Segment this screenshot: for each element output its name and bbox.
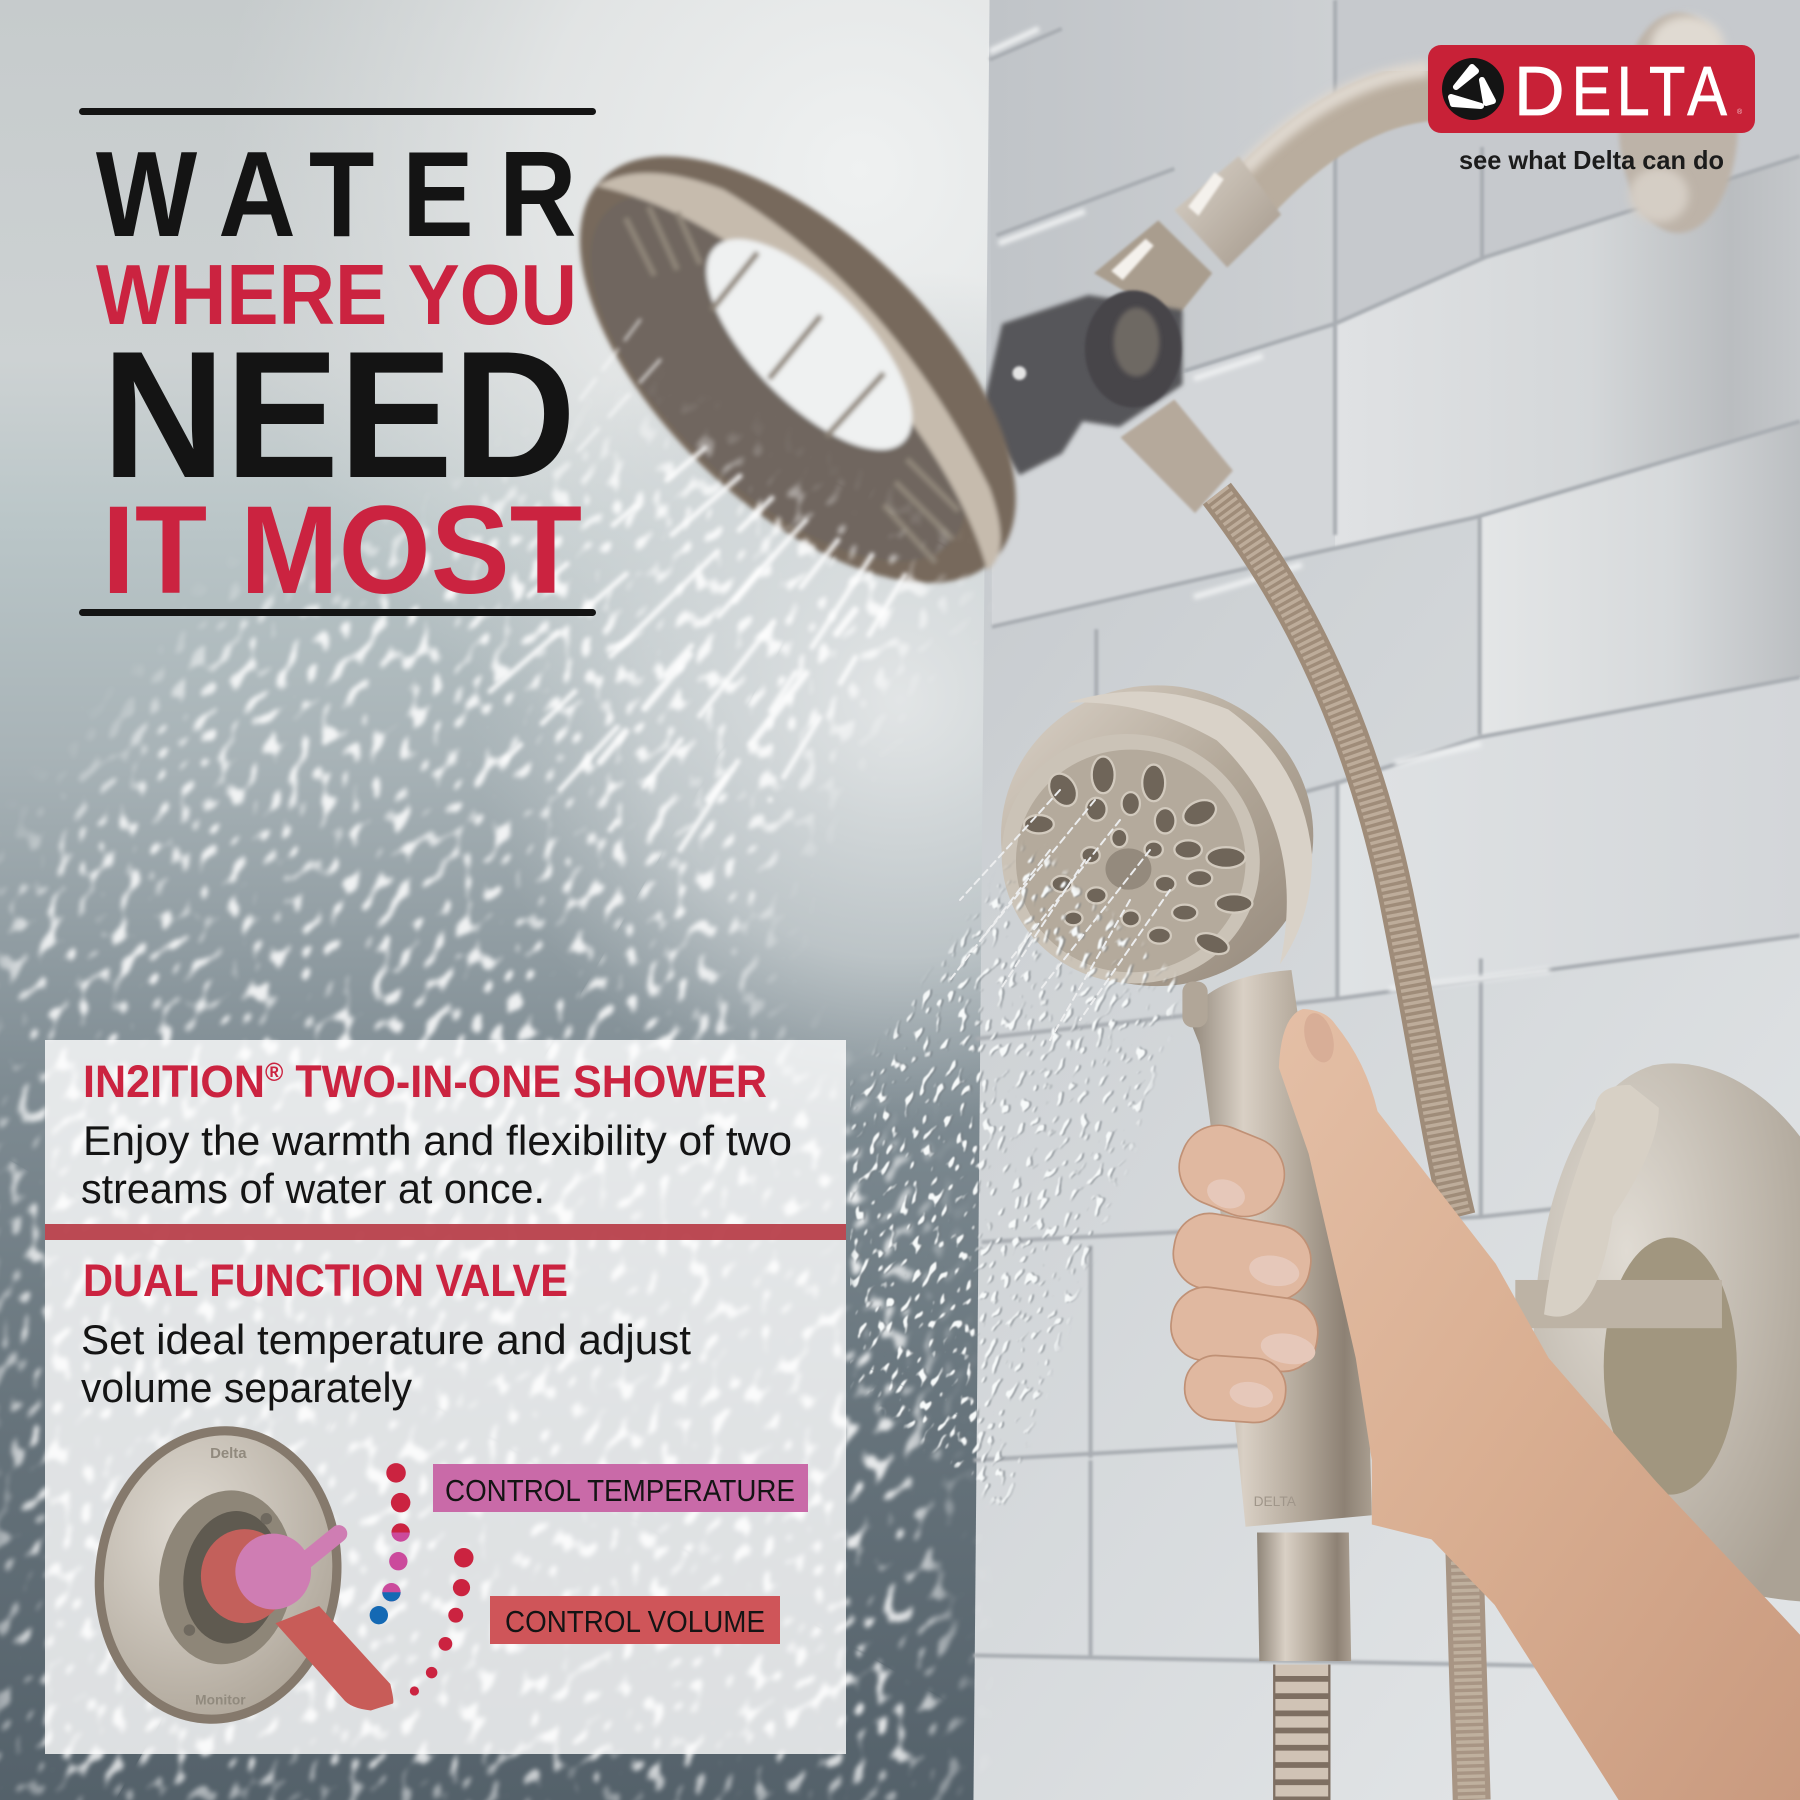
text: valve description: volume separately <box>81 1364 412 1411</box>
arm connector <box>1174 156 1281 267</box>
red lever <box>276 1606 393 1710</box>
heading: dual function valve: DUAL FUNCTION VALVE <box>83 1255 568 1306</box>
pink handle <box>266 1534 339 1592</box>
registered mark: ® <box>1737 108 1743 116</box>
logo badge <box>1428 45 1755 133</box>
temperature dots <box>370 1463 410 1624</box>
hose <box>1217 494 1472 1800</box>
valve illustration: Monitor <box>195 1693 246 1708</box>
heading: in2ition: TWO-IN-ONE SHOWER <box>283 1056 767 1107</box>
divider band <box>45 1224 846 1240</box>
title: need: NEED <box>102 314 576 516</box>
red collar <box>201 1529 288 1623</box>
logo wordmark: ELTA <box>1572 51 1728 130</box>
text: valve description: Set ideal temperature and adjust <box>81 1316 691 1363</box>
panel: product features <box>45 1040 846 1754</box>
lower hose <box>1273 1665 1330 1800</box>
label: control temperature <box>433 1464 808 1512</box>
diverter mount <box>982 290 1182 475</box>
text: valve description <box>81 1316 691 1411</box>
title: it most: IT MOST <box>102 481 582 620</box>
fingernails <box>1203 1010 1339 1410</box>
hand shower handle: DELTA <box>1254 1494 1297 1509</box>
hand shower handle <box>1182 970 1372 1800</box>
hand shower head <box>966 685 1313 1020</box>
tagline: see what Delta can do <box>1459 145 1724 175</box>
hand shower nozzles <box>1024 757 1252 958</box>
title bottom rule <box>79 609 596 616</box>
title: where you: WHERE YOU <box>96 248 577 343</box>
hand shower spray <box>850 840 1190 1520</box>
valve illustration: Delta <box>210 1445 247 1462</box>
tiled wall <box>973 0 1800 1800</box>
title block <box>79 108 596 620</box>
heading: in2ition: ® <box>265 1057 283 1087</box>
overhead shower head <box>507 82 1088 657</box>
water streaks <box>480 320 905 850</box>
Delta logo <box>1428 45 1755 175</box>
heading: in2ition: IN2ITION <box>83 1056 273 1107</box>
title top rule <box>79 108 596 115</box>
logo mark <box>1442 58 1504 120</box>
text: in2ition description <box>81 1117 792 1212</box>
label: control volume <box>490 1596 780 1644</box>
volume dots <box>410 1548 474 1696</box>
wall valve <box>1515 1063 1800 1601</box>
swivel connector <box>1094 220 1212 320</box>
title: water: WATER <box>96 127 576 263</box>
panel background <box>45 1040 846 1754</box>
hand shower jets <box>950 790 1170 1040</box>
label: control volume: CONTROL VOLUME <box>505 1604 765 1639</box>
logo wordmark: D <box>1514 52 1565 130</box>
text: in2ition description: streams of water at once. <box>81 1165 545 1212</box>
hand and arm <box>1167 1009 1800 1800</box>
text: in2ition description: Enjoy the warmth and flexibility of two <box>83 1117 792 1164</box>
hose connector <box>1120 399 1233 513</box>
main water spray <box>0 406 974 1800</box>
valve illustration <box>76 1410 393 1740</box>
wall flange and shower arm <box>1094 13 1738 320</box>
fingers <box>1167 1114 1322 1425</box>
label: control temperature: CONTROL TEMPERATURE <box>445 1473 795 1508</box>
handle collar <box>1257 1533 1351 1661</box>
